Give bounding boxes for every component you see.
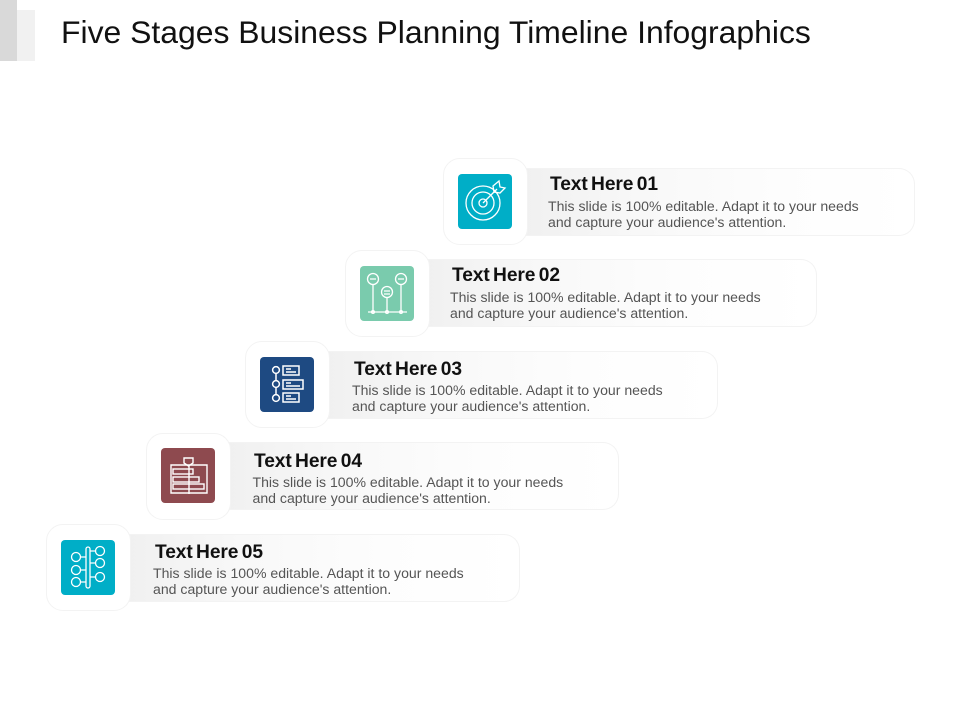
card 02: [423, 259, 817, 327]
text 04: This slide is 100% editable. Adapt it to your needs: [252, 474, 563, 490]
stage 01: [443, 158, 915, 245]
text 05: and capture your audience's attention.: [153, 581, 391, 597]
text 03: This slide is 100% editable. Adapt it to your needs: [352, 382, 663, 398]
card 05: [125, 534, 520, 602]
header accent block: dark: [0, 0, 17, 61]
text 03: [352, 382, 663, 414]
card 01: [521, 168, 915, 236]
stage 04: [146, 433, 619, 520]
icon: vertical list timeline: [260, 357, 314, 412]
text 05: [153, 565, 464, 597]
title: Five Stages Business Planning Timeline Infographics: [61, 14, 811, 50]
icon: target with arrow: [458, 174, 512, 229]
stage 03: [245, 341, 718, 428]
icon tile 05: [46, 524, 131, 611]
stage 02: [345, 250, 817, 337]
heading 05: Text Here 05: [155, 542, 263, 562]
icon: milestone pins: [360, 266, 414, 321]
icon tile 01: [443, 158, 528, 245]
header accent block: light: [17, 10, 35, 61]
icon tile 04: [146, 433, 231, 520]
text 04: [252, 474, 563, 506]
text 01: This slide is 100% editable. Adapt it to your needs: [548, 198, 859, 214]
text 02: and capture your audience's attention.: [450, 305, 688, 321]
text 02: This slide is 100% editable. Adapt it to your needs: [450, 289, 761, 305]
icon: gantt chart: [161, 448, 215, 503]
heading 03: Text Here 03: [354, 358, 462, 380]
heading 01: Text Here 01: [550, 174, 658, 195]
heading 04: Text Here 04: [254, 450, 362, 472]
text 01: [548, 198, 859, 230]
card 03: [324, 351, 718, 419]
card 04: [225, 442, 619, 510]
text 01: and capture your audience's attention.: [548, 214, 786, 230]
text 04: and capture your audience's attention.: [252, 490, 491, 506]
icon tile 02: [345, 250, 430, 337]
text 03: and capture your audience's attention.: [352, 398, 590, 414]
text 05: This slide is 100% editable. Adapt it to your needs: [153, 565, 464, 581]
text 02: [450, 289, 761, 321]
icon: branching nodes: [61, 540, 115, 595]
heading 02: Text Here 02: [452, 265, 560, 286]
icon tile 03: [245, 341, 330, 428]
stage 05: [46, 524, 520, 611]
